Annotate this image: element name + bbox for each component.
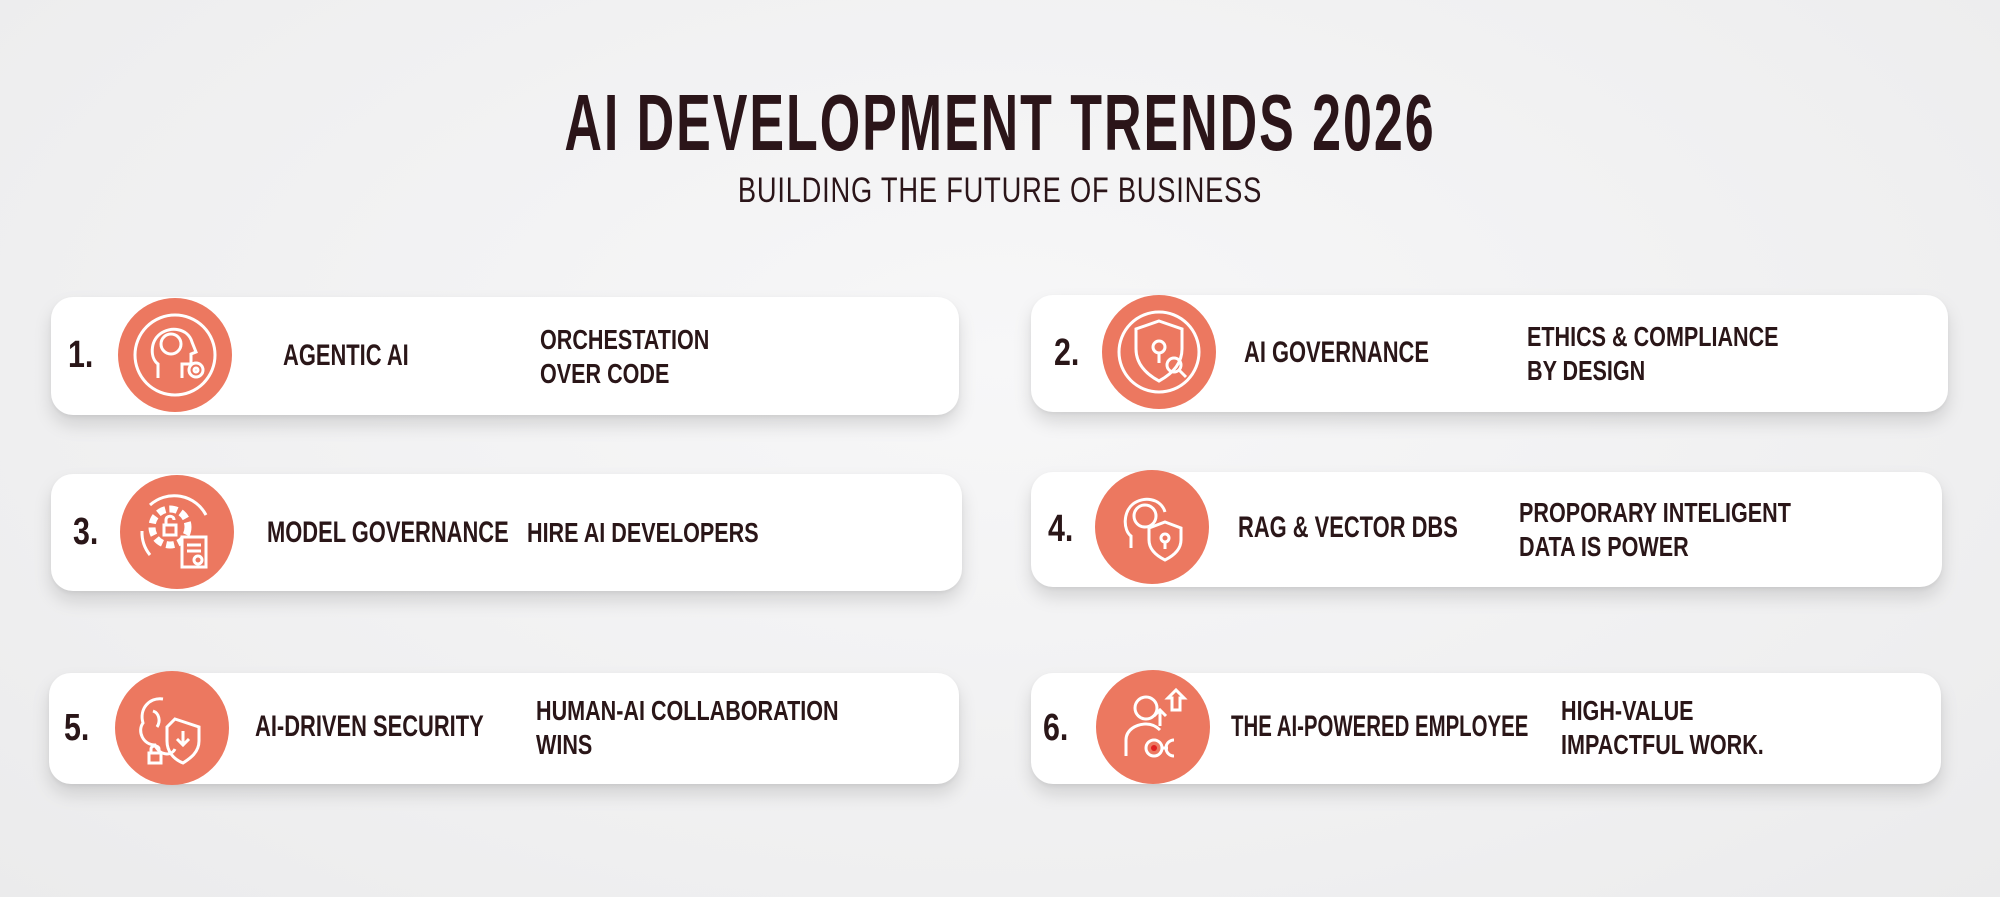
description: PROPORARY INTELIGENT bbox=[1519, 497, 1791, 528]
heading: AI-DRIVEN SECURITY bbox=[255, 710, 484, 743]
heading: THE AI-POWERED EMPLOYEE bbox=[1231, 710, 1528, 743]
icon: brain with shield bbox=[1095, 470, 1209, 584]
heading: RAG & VECTOR DBS bbox=[1238, 511, 1458, 544]
icon: shield with lock and magnifier bbox=[1102, 295, 1216, 409]
description: HIGH-VALUE bbox=[1561, 695, 1694, 726]
description: IMPACTFUL WORK. bbox=[1561, 729, 1764, 760]
heading: MODEL GOVERNANCE bbox=[267, 516, 509, 549]
subtitle: BUILDING THE FUTURE OF BUSINESS bbox=[738, 171, 1262, 210]
icon: brain with gear bbox=[118, 298, 232, 412]
description bbox=[1527, 321, 1779, 386]
panel: card 1 agentic ai bbox=[51, 297, 959, 415]
number 6: 6. bbox=[1043, 707, 1068, 749]
description: WINS bbox=[536, 729, 592, 760]
icon: gear with lock and document bbox=[120, 475, 234, 589]
number 2: 2. bbox=[1054, 332, 1079, 374]
number 5: 5. bbox=[64, 707, 89, 749]
description bbox=[1519, 497, 1791, 562]
description: OVER CODE bbox=[540, 358, 669, 389]
panel: card 6 the ai-powered employee bbox=[1031, 673, 1941, 784]
icon: brain with shield and lock bbox=[115, 671, 229, 785]
description: ORCHESTATION bbox=[540, 324, 709, 355]
heading: AGENTIC AI bbox=[283, 339, 409, 372]
number 1: 1. bbox=[68, 334, 93, 376]
panel: card 3 model governance bbox=[51, 474, 962, 591]
description: HUMAN-AI COLLABORATION bbox=[536, 695, 839, 726]
description bbox=[536, 695, 839, 760]
heading: AI GOVERNANCE bbox=[1244, 336, 1429, 369]
icon: person with arrows and robot hand bbox=[1096, 670, 1210, 784]
description: HIRE AI DEVELOPERS bbox=[527, 517, 759, 548]
number 4: 4. bbox=[1048, 508, 1073, 550]
panel: card 2 ai governance bbox=[1031, 295, 1948, 412]
number 3: 3. bbox=[73, 511, 98, 553]
description: ETHICS & COMPLIANCE bbox=[1527, 321, 1779, 352]
title: AI DEVELOPMENT TRENDS 2026 bbox=[564, 78, 1436, 167]
panel: card 4 rag and vector dbs bbox=[1031, 472, 1942, 587]
description: DATA IS POWER bbox=[1519, 531, 1689, 562]
description: BY DESIGN bbox=[1527, 355, 1645, 386]
panel: card 5 ai-driven security bbox=[49, 673, 959, 784]
description bbox=[540, 324, 709, 389]
description bbox=[1561, 695, 1764, 760]
